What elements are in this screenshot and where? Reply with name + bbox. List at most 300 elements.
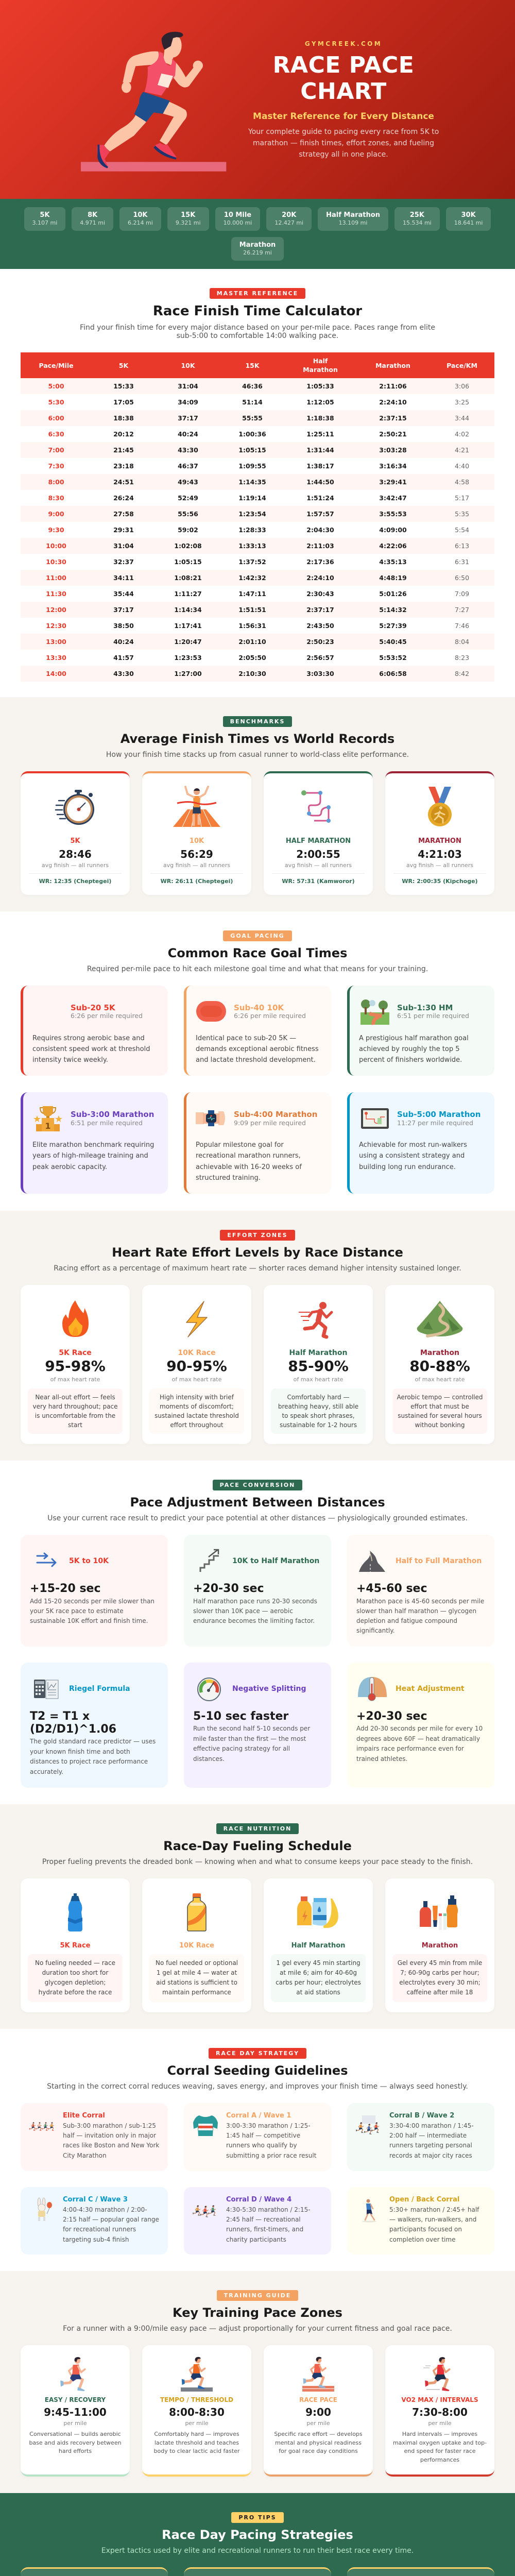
finish time table: 55:55: [242, 414, 263, 422]
finish time table: 2:24:10: [306, 574, 334, 582]
corral description: runners targeting personal: [389, 2142, 472, 2149]
goal title: Sub-4:00 Marathon: [234, 1110, 317, 1119]
fueling note: [271, 1954, 366, 2002]
finish time table: 12:00: [46, 606, 66, 614]
finish time table: 2:50:23: [306, 638, 334, 646]
finish time table: 5:30: [48, 398, 64, 406]
icon: finish line runner: [173, 785, 220, 827]
unit: per mile: [428, 2420, 452, 2427]
finish time table: 2:11:06: [379, 382, 407, 390]
pill 25K: 25K: [410, 211, 424, 219]
card: 10K fueling: [142, 1878, 251, 2012]
corral description: submitting a prior race result: [226, 2152, 316, 2159]
explanation: slower than half marathon — glycogen: [356, 1607, 476, 1615]
finish time table: 5:27:39: [379, 622, 407, 630]
card: race pace: [264, 2345, 373, 2477]
icon: trail scene: [360, 999, 389, 1025]
pill half marathon: [318, 207, 388, 231]
corral description: [226, 2205, 311, 2245]
race label: 5K Race: [60, 1942, 90, 1950]
badge: PRO TIPS: [238, 2514, 277, 2521]
card: corral C: [21, 2187, 168, 2255]
description: Proper fueling prevents the dreaded bonk — knowing when and what to consume keeps your pace steady to the finish.: [42, 1858, 473, 1866]
finish time table: 9:30: [48, 526, 64, 534]
finish time table: 6:31: [455, 558, 469, 566]
panel: pace conversion: [0, 1461, 515, 1804]
goal pace: 11:27 per mile required: [397, 1119, 473, 1127]
title: Race Finish Time Calculator: [153, 303, 362, 319]
badge: GOAL PACING: [230, 933, 285, 939]
fueling note: 7; 60-90g carbs per hour;: [400, 1969, 479, 1976]
zone label: EASY / RECOVERY: [45, 2396, 106, 2403]
finish time table: 5K: [119, 362, 128, 369]
explanation: your 5K race pace to estimate: [30, 1607, 124, 1615]
goal title: Sub-1:30 HM: [397, 1003, 453, 1012]
zone description: [21, 2430, 130, 2456]
finish time table: 2:05:50: [238, 654, 266, 662]
panel: race nutrition: [0, 1804, 515, 2029]
explanation: degrees above 60F — heat dramatically: [356, 1735, 480, 1742]
caption: avg finish — all runners: [163, 862, 230, 869]
card title: Half to Full Marathon: [396, 1557, 482, 1565]
finish time table: 2:56:57: [306, 654, 334, 662]
finish time table: 2:50:21: [379, 430, 407, 438]
icon: flame: [62, 1300, 89, 1337]
finish time table: 14:00: [46, 670, 66, 677]
goal description: [32, 1141, 154, 1171]
badge: RACE NUTRITION: [224, 1825, 291, 1832]
zone description: Specific race effort — develops: [274, 2431, 363, 2437]
explanation: distances to project race performance: [30, 1758, 148, 1765]
effort description: [392, 1388, 487, 1434]
corral description: races like Boston and New York: [63, 2142, 159, 2149]
finish time table: 1:47:11: [238, 590, 266, 598]
effort description: is uncomfortable from the: [35, 1412, 115, 1419]
finish time table: 1:31:44: [306, 446, 334, 454]
finish time table: 26:24: [113, 494, 134, 502]
pill half marathon: Half Marathon: [326, 211, 380, 219]
description: Starting in the correct corral reduces weaving, saves energy, and improves your finish time — always seed honestly.: [47, 2082, 468, 2091]
effort description: Near all-out effort — feels: [35, 1394, 115, 1401]
fueling note: carbs per hour; electrolytes: [276, 1978, 361, 1986]
finish time table: 10:30: [46, 558, 66, 566]
corral description: runners who qualify by: [226, 2142, 297, 2149]
finish time table: 12:30: [46, 622, 66, 630]
finish time table: 5:00: [48, 382, 64, 390]
finish time table: 5:17: [455, 494, 469, 502]
goal description: consistent speed work at threshold: [32, 1045, 150, 1053]
explanation: Add 15-20 seconds per mile slower than: [30, 1598, 154, 1605]
caption: of max heart rate: [294, 1376, 343, 1383]
finish time table: 34:11: [113, 574, 134, 582]
badge: [210, 288, 305, 299]
zone description: [142, 2430, 251, 2456]
card title: Negative Splitting: [232, 1685, 306, 1693]
finish time table: 1:08:21: [174, 574, 202, 582]
unit: per mile: [185, 2420, 209, 2427]
adjustment value: +45-60 sec: [356, 1582, 427, 1595]
divider and world record: WR: 26:11 (Cheptegei): [161, 878, 233, 885]
finish time table: 40:24: [113, 638, 134, 646]
finish time table: 3:55:53: [379, 510, 407, 518]
goal pace: 6:51 per mile required: [71, 1119, 143, 1127]
pill 20K: 12.427 mi: [274, 219, 303, 226]
icon: recreational runners: [192, 2197, 219, 2224]
icon: stopwatch: [55, 790, 94, 825]
description: sub-5:00 to comfortable 14:00 walking pace.: [177, 332, 338, 340]
finish time table: Pace/KM: [447, 362, 477, 369]
card: half fueling: [264, 1878, 373, 2012]
panel: distance pills: [0, 199, 515, 269]
card: sub-4:00 marathon: [184, 1092, 331, 1194]
finish time table: Pace/Mile: [39, 362, 74, 369]
race label: Marathon: [422, 1942, 458, 1950]
zone pace: 9:00: [305, 2406, 331, 2418]
finish time table: 6:13: [455, 542, 469, 550]
adjustment value: +20-30 sec: [193, 1582, 264, 1595]
pill 15K: 9.321 mi: [176, 219, 201, 226]
brand eyebrow: GYMCREEK.COM: [305, 40, 382, 47]
panel: pro tips: [0, 2493, 515, 2576]
zone description: performances: [420, 2456, 459, 2463]
badge: EFFORT ZONES: [227, 1232, 288, 1239]
corral description: — walkers, run-walkers, and: [389, 2216, 476, 2223]
pill 8K: 4.971 mi: [80, 219, 105, 226]
finish time table: 51:14: [242, 398, 263, 406]
fueling note: [28, 1954, 123, 2002]
finish time table: 23:18: [113, 462, 134, 470]
card: tempo threshold: [142, 2345, 251, 2477]
card: VO2 max: [385, 2345, 494, 2477]
card: sub-1:30 HM: [347, 986, 494, 1076]
finish time table: 1:28:33: [238, 526, 266, 534]
finish time table: 6:00: [48, 414, 64, 422]
card: corral B: [347, 2103, 494, 2171]
finish time table: 1:56:31: [238, 622, 266, 630]
effort value: 90-95%: [166, 1358, 227, 1375]
card: marathon benchmark: [385, 771, 494, 895]
finish time table: 6:50: [455, 574, 469, 582]
description: Racing effort as a percentage of maximum heart rate — shorter races demand higher intensity sustained longer.: [54, 1264, 461, 1273]
main title: CHART: [300, 78, 387, 105]
zone pace: 8:00-8:30: [169, 2406, 225, 2418]
badge: [223, 716, 292, 727]
description: For a runner with a 9:00/mile easy pace — adjust proportionally for your current fitness and goal race pace.: [63, 2325, 452, 2333]
average time: 56:29: [180, 848, 213, 860]
finish time table: 13:30: [46, 654, 66, 662]
corral title: Corral A / Wave 1: [226, 2112, 291, 2120]
finish time table: 5:01:26: [379, 590, 407, 598]
divider and world record: [29, 873, 122, 886]
finish time table: 2:10:30: [238, 670, 266, 677]
unit: per mile: [63, 2420, 87, 2427]
title: Average Finish Times vs World Records: [121, 732, 394, 746]
corral description: 1:45 half — competitive: [226, 2132, 300, 2139]
finish time table: 6:30: [48, 430, 64, 438]
icon: trophy on podium: 1: [45, 1121, 51, 1131]
finish time table: 1:51:51: [238, 606, 266, 614]
average time: 4:21:03: [418, 848, 462, 860]
finish time table: 35:44: [113, 590, 134, 598]
average time: 28:46: [59, 848, 92, 860]
card: sub-20 5K: [21, 986, 168, 1076]
panel: training guide: [0, 2271, 515, 2493]
corral title: Elite Corral: [63, 2112, 105, 2120]
race label: 10K Race: [179, 1942, 214, 1950]
icon: race pace runner on track: [300, 2354, 337, 2392]
effort description: Comfortably hard —: [287, 1394, 349, 1401]
panel: effort zones: [0, 1211, 515, 1461]
badge: [217, 2290, 298, 2301]
goal description: Elite marathon benchmark requiring: [32, 1141, 154, 1149]
icon: medal: [428, 787, 452, 826]
subtitle: Master Reference for Every Distance: [253, 111, 434, 122]
finish time table: Half: [313, 357, 328, 365]
finish time table: 4:58: [455, 478, 469, 486]
title: Pace Adjustment Between Distances: [130, 1495, 385, 1510]
corral title: Corral C / Wave 3: [63, 2196, 128, 2204]
goal description: [196, 1141, 302, 1182]
finish time table: 5:35: [455, 510, 469, 518]
corral description: [389, 2121, 474, 2161]
zone description: maximal oxygen uptake and top-: [393, 2439, 487, 2446]
finish time table: 5:14:32: [379, 606, 407, 614]
zone description: body to clear lactic acid faster: [154, 2448, 239, 2454]
zone description: [264, 2430, 373, 2456]
caption: of max heart rate: [172, 1376, 221, 1383]
title: Key Training Pace Zones: [173, 2306, 342, 2320]
main title: RACE PACE: [273, 52, 414, 78]
finish time table: 3:25: [455, 398, 469, 406]
goal title: Sub-40 10K: [234, 1003, 284, 1012]
finish time table: 5:53:52: [379, 654, 407, 662]
badge: RACE DAY STRATEGY: [216, 2050, 299, 2057]
distance label: HALF MARATHON: [286, 837, 351, 845]
card: 5K to 10K: [21, 1535, 168, 1647]
finish time table: [21, 352, 494, 682]
distance label: MARATHON: [418, 837, 461, 845]
panel: hero banner: [0, 0, 515, 199]
finish time table: 10K: [181, 362, 195, 369]
card: negative splitting: [184, 1663, 331, 1788]
finish time table: 1:51:24: [306, 494, 334, 502]
goal description: Popular milestone goal for: [196, 1141, 284, 1149]
icon: elite runners: [28, 2113, 56, 2140]
finish time table: 1:05:15: [174, 558, 202, 566]
explanation: Run the second half 5-10 seconds per: [193, 1725, 310, 1732]
card: half marathon benchmark: [264, 771, 373, 895]
finish time table: 1:09:55: [238, 462, 266, 470]
finish time table: 3:06: [455, 382, 469, 390]
title: Corral Seeding Guidelines: [167, 2063, 348, 2078]
explanation: [30, 1598, 154, 1624]
corral description: 3:00-3:30 marathon / 1:25-: [226, 2122, 311, 2129]
finish time table: 7:30: [48, 462, 64, 470]
goal description: [359, 1141, 467, 1171]
pill 20K: [266, 207, 312, 231]
finish time table: 43:30: [178, 446, 198, 454]
explanation: [193, 1598, 317, 1624]
goal description: structured training.: [196, 1174, 261, 1182]
finish time table: 43:30: [113, 670, 134, 677]
section heading: [0, 1823, 515, 1870]
finish time table: 2:17:36: [306, 558, 334, 566]
finish time table: 1:05:33: [306, 382, 334, 390]
finish time table: 1:20:47: [174, 638, 202, 646]
goal title: Sub-20 5K: [71, 1003, 115, 1012]
finish time table: 4:48:19: [379, 574, 407, 582]
pill marathon: [231, 237, 284, 261]
description: Find your finish time for every major distance based on your per-mile pace. Paces range from elite: [80, 324, 435, 332]
zone description: end speed for faster race: [404, 2448, 476, 2454]
card: half to full: [347, 1535, 494, 1647]
goal description: [359, 1035, 469, 1064]
explanation: slower than 10K pace — aerobic: [193, 1607, 293, 1615]
effort description: to speak short phrases,: [282, 1412, 355, 1419]
card: sub-3:00 marathon: [21, 1092, 168, 1194]
corral description: 4:00-4:30 marathon / 2:00-: [63, 2206, 147, 2213]
explanation: Marathon pace is 45-60 seconds per mile: [356, 1598, 484, 1605]
card: corral A: [184, 2103, 331, 2171]
pill half marathon: 13.109 mi: [339, 219, 367, 226]
fueling note: duration too short for: [42, 1969, 108, 1976]
pill 15K: 15K: [181, 211, 195, 219]
card: heat adjustment: [347, 1663, 494, 1788]
card: 10K effort: [142, 1285, 251, 1444]
effort description: sustainable for 1-2 hours: [280, 1421, 357, 1429]
zone description: [385, 2430, 494, 2464]
divider and world record: WR: 12:35 (Cheptegei): [39, 878, 111, 885]
corral description: runners, first-timers, and: [226, 2226, 303, 2233]
caption: of max heart rate: [415, 1376, 465, 1383]
formula value: (D2/D1)^1.06: [30, 1723, 116, 1736]
goal description: percent of finishers worldwide.: [359, 1056, 462, 1064]
icon: race shirt: [192, 2113, 219, 2140]
finish time table: 1:25:11: [306, 430, 334, 438]
pill 10K: 10K: [133, 211, 148, 219]
finish time table: 8:42: [455, 670, 469, 677]
finish time table: 6:06:58: [379, 670, 407, 677]
effort value: 80-88%: [409, 1358, 470, 1375]
goal description: [196, 1035, 319, 1064]
finish time table: 17:05: [113, 398, 134, 406]
goal description: intensity twice weekly.: [32, 1056, 108, 1064]
fueling note: at mile 6; aim for 40-60g: [280, 1969, 357, 1976]
race label: Half Marathon: [289, 1349, 347, 1357]
finish time table: 11:30: [46, 590, 66, 598]
zone label: RACE PACE: [299, 2396, 337, 2403]
explanation: effective pacing strategy for all: [193, 1745, 290, 1752]
corral description: records at major city races: [389, 2152, 472, 2159]
divider and world record: [393, 873, 486, 886]
icon: track oval: [196, 1001, 226, 1022]
effort description: very hard throughout; pace: [32, 1403, 118, 1410]
finish time table: 8:00: [48, 478, 64, 486]
corral description: for recreational runners: [63, 2226, 136, 2233]
card: 5K effort: [21, 1285, 130, 1444]
finish time table: 59:02: [178, 526, 198, 534]
fueling note: glycogen depletion;: [45, 1978, 106, 1986]
corral title: Corral B / Wave 2: [389, 2112, 454, 2120]
icon: red sprinter: [299, 1302, 333, 1338]
intro text: marathon — finish times, effort zones, and fueling: [253, 139, 434, 147]
finish time table: 32:37: [113, 558, 134, 566]
finish time table: 21:45: [113, 446, 134, 454]
finish time table: 13:00: [46, 638, 66, 646]
card: 5K benchmark: [21, 771, 130, 895]
pill 25K: 15.534 mi: [403, 219, 432, 226]
section heading: [87, 930, 428, 973]
finish time table: 1:18:38: [306, 414, 334, 422]
zone description: for goal race day conditions: [279, 2448, 358, 2454]
zone description: Comfortably hard — improves: [154, 2431, 239, 2437]
title: Race Day Pacing Strategies: [162, 2528, 353, 2542]
description: Use your current race result to predict your pace potential at other distances — physiologically grounded estimates.: [47, 1514, 468, 1522]
finish time table: 8:04: [455, 638, 469, 646]
finish time table: 5:54: [455, 526, 469, 534]
finish time table: 8:30: [48, 494, 64, 502]
pill 30K: [446, 207, 491, 231]
effort description: effort that must be: [410, 1403, 469, 1410]
race label: Marathon: [420, 1349, 459, 1357]
explanation: your known finish time and both: [30, 1748, 130, 1755]
section heading: [80, 288, 435, 340]
card: open corral: [347, 2187, 494, 2255]
zone description: Hard intervals — improves: [402, 2431, 477, 2437]
fueling note: No fuel needed or optional: [156, 1959, 238, 1966]
finish time table: Marathon: [375, 362, 410, 369]
explanation: endurance becomes the limiting factor.: [193, 1617, 315, 1624]
card title: Riegel Formula: [69, 1685, 130, 1693]
finish time table: 2:11:03: [306, 542, 334, 550]
goal description: peak aerobic capacity.: [32, 1163, 107, 1171]
caption: avg finish — all runners: [42, 862, 109, 869]
race label: 10K Race: [178, 1349, 216, 1357]
goal description: [32, 1035, 150, 1064]
finish time table: 7:09: [455, 590, 469, 598]
finish time table: 2:04:30: [306, 526, 334, 534]
finish time table: 4:22:06: [379, 542, 407, 550]
effort value: 85-90%: [288, 1358, 349, 1375]
panel: race day strategy: [0, 2029, 515, 2271]
caption: of max heart rate: [50, 1376, 100, 1383]
zone label: TEMPO / THRESHOLD: [160, 2396, 233, 2403]
finish time table: 1:27:00: [174, 670, 202, 677]
corral description: targeting sub-4 finish: [63, 2236, 129, 2243]
finish time table: 37:17: [113, 606, 134, 614]
finish time table: 1:11:27: [174, 590, 202, 598]
finish time table: 4:09:00: [379, 526, 407, 534]
finish time table: 38:50: [113, 622, 134, 630]
fueling note: hydrate before the race: [39, 1989, 112, 1996]
pill marathon: Marathon: [239, 241, 276, 249]
goal description: A prestigious half marathon goal: [359, 1035, 469, 1042]
pill 10 mile: [215, 207, 260, 231]
card title: 10K to Half Marathon: [232, 1557, 319, 1565]
finish time table: 9:00: [48, 510, 64, 518]
corral description: half — invitation only in major: [63, 2132, 156, 2139]
icon: crowd of runners: [355, 2113, 383, 2140]
goal title: Sub-5:00 Marathon: [397, 1110, 480, 1119]
corral description: participants focused on: [389, 2226, 462, 2233]
finish time table: 7:46: [455, 622, 469, 630]
section heading: [0, 2290, 515, 2336]
distance label: 5K: [70, 837, 80, 845]
icon: calculator and chart: [34, 1680, 59, 1699]
explanation: impairs race performance even for: [356, 1745, 464, 1752]
fueling note: Gel every 45 min from mile: [398, 1959, 482, 1966]
finish time table: 3:16:34: [379, 462, 407, 470]
